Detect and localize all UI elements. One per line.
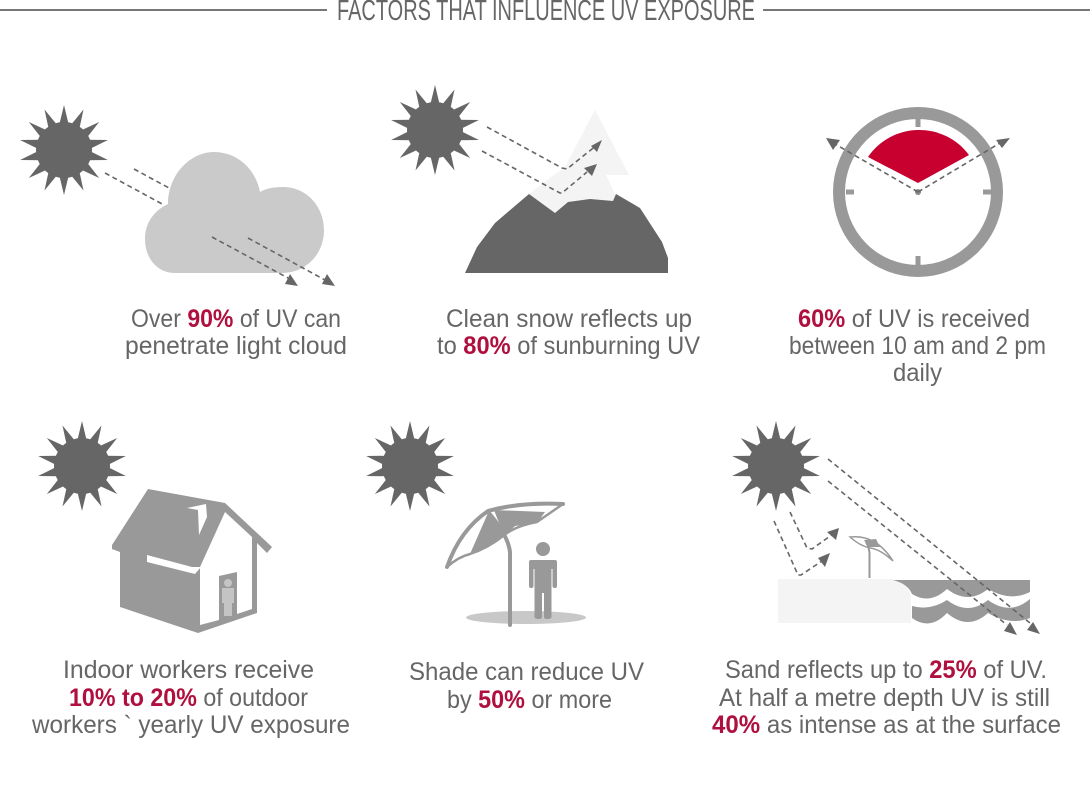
arrows: UV rays on sand and water — [774, 459, 1040, 635]
panel: time of day — [789, 113, 1046, 387]
text: cloud caption: penetrate light cloud — [125, 332, 347, 360]
text: snow caption — [437, 305, 700, 360]
text: time caption: between 10 am and 2 pm — [789, 332, 1046, 360]
text: sand caption: 40% as intense as at the surface — [712, 711, 1061, 739]
icon: cloud — [145, 152, 324, 273]
text: indoor caption: workers ` yearly UV exposure — [31, 711, 350, 739]
text: sand caption: At half a metre depth UV is still — [719, 684, 1050, 712]
text: time caption: 60% of UV is received — [798, 305, 1030, 333]
text: shade caption: by 50% or more — [447, 686, 612, 714]
text: time caption: daily — [893, 359, 942, 387]
text: shade caption — [409, 658, 644, 714]
icon: sun — [19, 105, 109, 195]
text: snow caption: Clean snow reflects up — [446, 305, 692, 333]
icon: sand — [778, 579, 911, 623]
text: indoor caption — [31, 656, 350, 739]
panel: light cloud — [19, 105, 347, 360]
icon: snow cap — [528, 110, 629, 214]
arrows: UV rays reflected by snow — [482, 127, 602, 193]
chart: red wedge 10am to 2pm — [868, 130, 969, 183]
arrows: UV rays through cloud — [105, 169, 335, 286]
text: indoor caption: Indoor workers receive — [63, 656, 314, 684]
text: cloud caption: Over 90% of UV can — [131, 305, 341, 333]
icon: water waves — [893, 580, 1030, 623]
panel: shade — [365, 421, 644, 714]
icon: sun — [390, 85, 480, 175]
icon: person — [529, 542, 557, 619]
icon: clock — [839, 113, 997, 271]
text: indoor caption: 10% to 20% of outdoor — [69, 684, 308, 712]
icon: house — [112, 489, 272, 633]
text: sand caption: Sand reflects up to 25% of UV. — [725, 656, 1047, 684]
panel: sand and water — [712, 421, 1061, 739]
text: shade caption: Shade can reduce UV — [409, 658, 644, 686]
text: snow caption: to 80% of sunburning UV — [437, 332, 700, 360]
text: cloud caption — [125, 305, 347, 360]
panel: snow — [390, 85, 700, 360]
arrows: clock hands — [826, 138, 1010, 192]
icon: mountain — [465, 194, 668, 273]
icon: ground shadow — [466, 611, 586, 624]
icon: sun — [37, 421, 127, 511]
text: sand caption — [712, 656, 1061, 739]
panel: indoor workers — [31, 421, 350, 739]
icon: sun — [365, 421, 455, 511]
text: time caption — [789, 305, 1046, 387]
icon: small umbrella — [850, 537, 893, 578]
icon: sun — [731, 421, 821, 511]
icon: umbrella — [447, 504, 563, 625]
